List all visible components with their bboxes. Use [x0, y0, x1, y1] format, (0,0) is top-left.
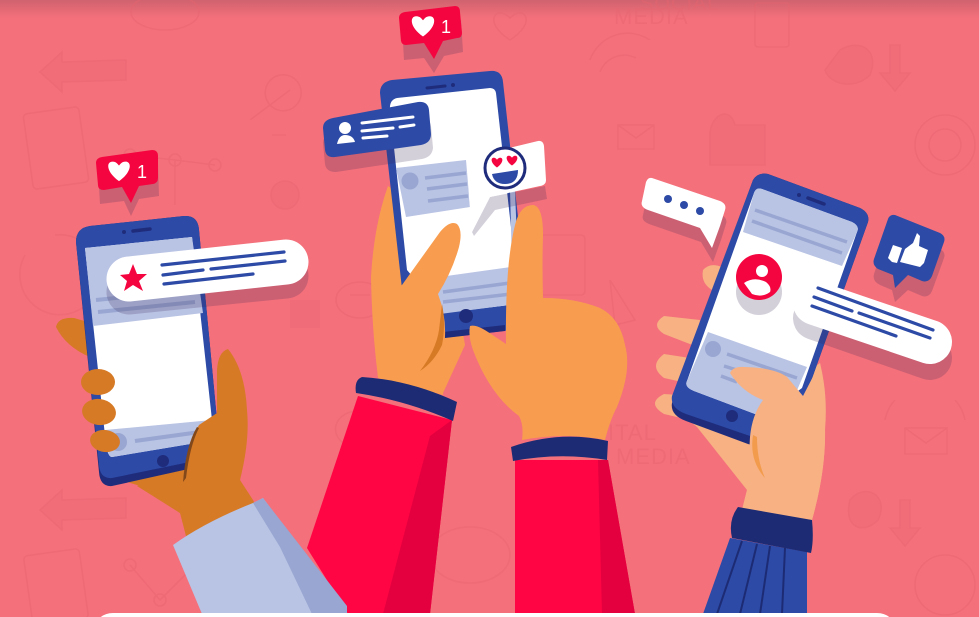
right palm back: [693, 363, 825, 520]
center like badge: 1: [441, 17, 451, 37]
bottom white panel: [95, 613, 895, 617]
thumbs-up icon: [888, 233, 928, 267]
left message pill: [120, 252, 286, 292]
right message pill: [812, 288, 933, 358]
emoji speech bubble: [468, 141, 547, 236]
right phone screen: [686, 188, 858, 414]
right sleeve: [703, 538, 807, 614]
left phone screen: [85, 237, 214, 457]
right center sleeve: [515, 460, 635, 614]
center left hand back: [371, 186, 465, 393]
left like badge: [96, 150, 159, 216]
heart-eyes emoji: [485, 148, 525, 188]
left hand front with fingers: [81, 369, 220, 513]
right phone: [672, 174, 868, 452]
right pointing hand: [469, 205, 627, 440]
dots speech bubble: [642, 178, 726, 262]
profile avatar: [736, 254, 782, 315]
center phone screen: [390, 88, 518, 313]
background doodles: ITAL: [608, 420, 657, 445]
left light-blue sleeve: [173, 498, 347, 614]
top shadow band: [0, 0, 979, 18]
center left thumb: [372, 223, 461, 395]
right cuff: [731, 507, 813, 553]
right cuff: [511, 437, 608, 461]
center phone: [380, 71, 530, 342]
right hand thumb: [730, 363, 826, 520]
background doodles: MEDIA: [616, 444, 691, 469]
center like badge: [399, 6, 463, 73]
person icon: [339, 122, 351, 134]
heart icon: [108, 162, 130, 181]
left like badge: 1: [137, 162, 147, 182]
right hand back fingers: [655, 265, 722, 420]
left phone: [76, 216, 220, 486]
star icon: [120, 264, 147, 291]
center-left red sleeve: [307, 396, 452, 614]
background doodles: MEDIA: [614, 4, 689, 29]
center profile bubble: [323, 102, 433, 172]
thumbs-up speech bubble: [874, 215, 944, 302]
left hand back: [56, 318, 90, 357]
center-left cuff: [356, 377, 457, 421]
